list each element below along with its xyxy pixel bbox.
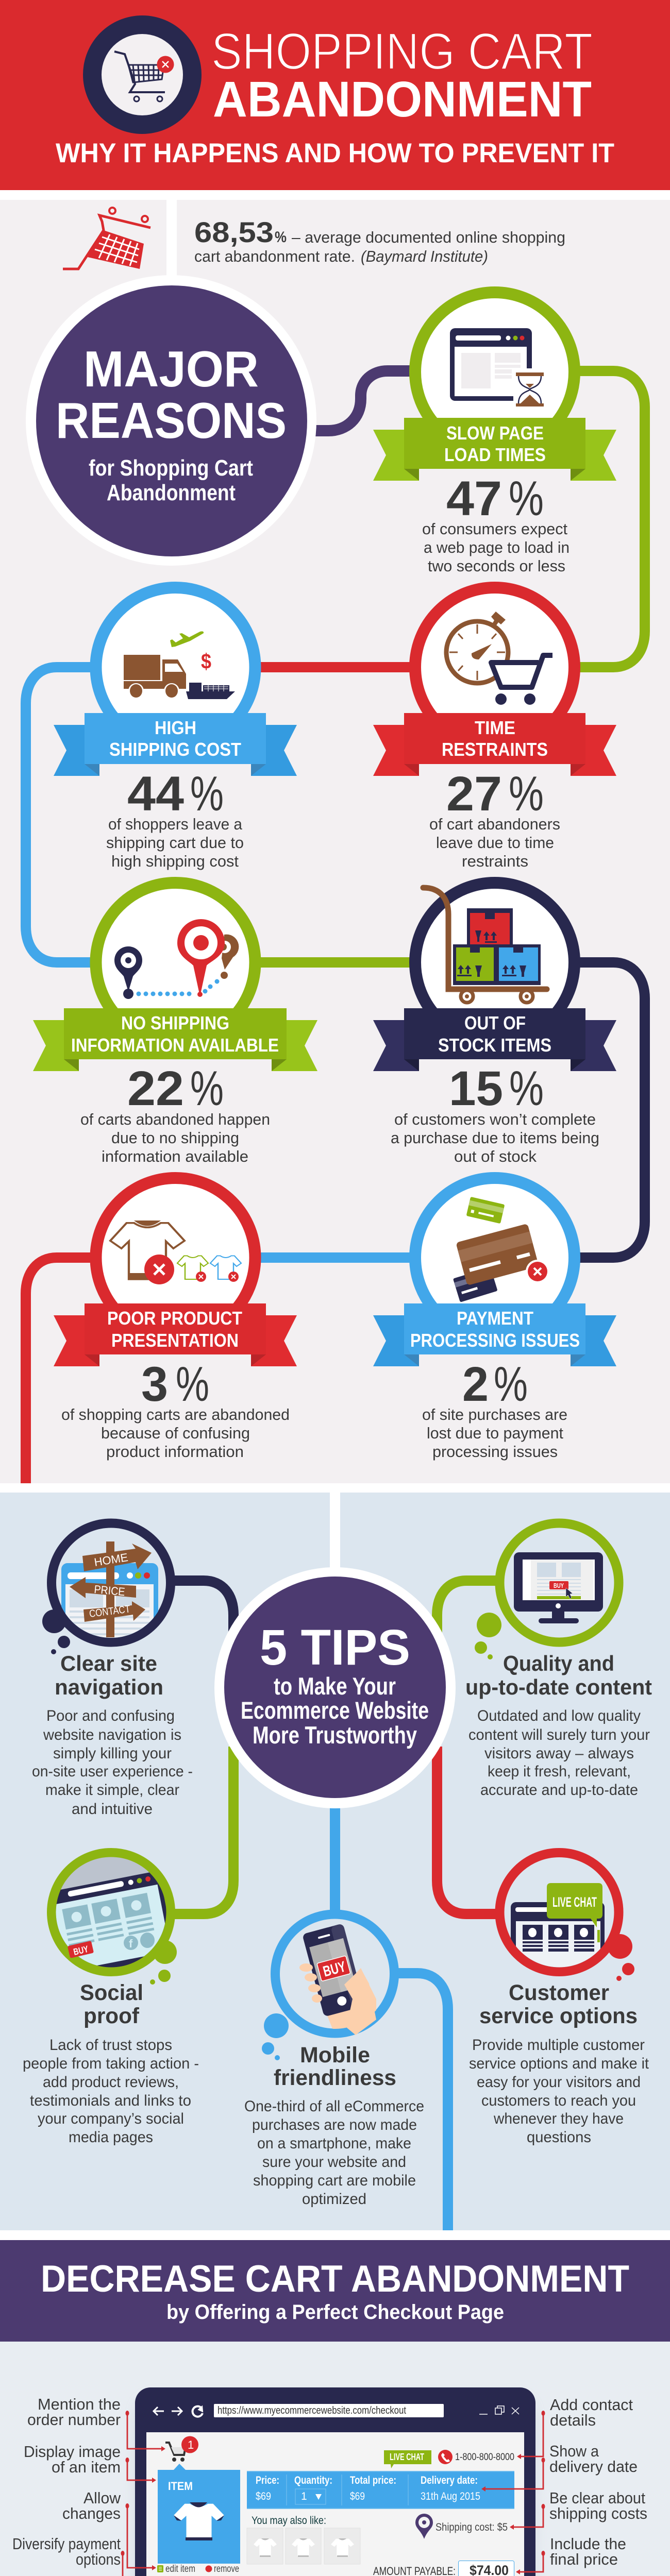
circle: five tips	[214, 1567, 456, 1808]
heading	[479, 1980, 638, 2028]
order table: $69	[256, 2490, 271, 2502]
description: purchases are now made	[252, 2116, 417, 2133]
callouts: left labels: order number	[27, 2411, 121, 2429]
statistic: abandonment rate: (Baymard Institute)	[361, 247, 488, 265]
statistic: 44	[127, 767, 184, 821]
ribbon label: PAYMENT	[457, 1308, 533, 1329]
panel: slow page load times	[373, 293, 616, 575]
description: of site purchases are	[422, 1405, 567, 1423]
callouts: left labels: Diversify payment	[12, 2535, 121, 2553]
heading: Clear site	[60, 1651, 157, 1675]
item card: edit item	[165, 2564, 195, 2574]
description: simply killing your	[53, 1745, 172, 1762]
arrows: callout pointers	[121, 2411, 545, 2576]
statistic: abandonment rate	[194, 216, 565, 265]
description: and intuitive	[72, 1801, 153, 1818]
circle: major reasons	[26, 275, 316, 566]
section background: five tips	[0, 1493, 670, 2230]
icon: social browser in bubble: f	[129, 1937, 133, 1950]
ribbon label	[410, 1308, 580, 1351]
contact phone	[438, 2450, 514, 2464]
statistic	[462, 1357, 528, 1412]
icon: live chat browser	[500, 1853, 634, 1981]
description: media pages	[69, 2129, 153, 2146]
heading: 5 tips: 5 TIPS	[260, 1619, 410, 1675]
order table: Quantity:	[294, 2475, 332, 2486]
amount payable	[373, 2561, 514, 2576]
section background: major reasons	[0, 200, 670, 1483]
heading: Social	[80, 1980, 143, 2005]
icon: browser with hourglass	[450, 328, 546, 410]
shipping cost	[415, 2514, 508, 2539]
description: whenever they have	[493, 2110, 624, 2127]
live chat button	[384, 2450, 431, 2468]
callouts: left labels: changes	[62, 2504, 121, 2522]
ribbon label	[438, 1012, 551, 1056]
description: a web page to load in	[424, 538, 569, 556]
banner: decrease cart abandonment	[0, 2240, 670, 2342]
icon: truck, plane and ship: $	[201, 649, 211, 673]
description: leave due to time	[436, 834, 554, 852]
callouts: right labels: Add contact	[550, 2396, 633, 2414]
icon: phone in hand: BUY	[322, 1958, 347, 1980]
ribbon	[373, 1303, 616, 1366]
description: a purchase due to items being	[391, 1129, 599, 1147]
ribbon label: HIGH	[155, 717, 196, 738]
order table	[247, 2471, 514, 2509]
subheading: Abandonment	[107, 480, 236, 505]
heading: navigation	[55, 1675, 163, 1699]
heading	[55, 1651, 163, 1699]
panel: poor product presentation	[54, 1178, 297, 1461]
callouts: right labels: Show a	[549, 2442, 599, 2460]
icon: social browser in bubble	[47, 1848, 177, 1985]
subheading: for Shopping Cart	[89, 455, 253, 481]
heading: proof	[83, 2004, 140, 2028]
panel: time restraints	[373, 587, 616, 870]
description	[391, 1110, 599, 1165]
description: accurate and up-to-date	[480, 1782, 638, 1799]
header	[0, 0, 670, 190]
statistic: 15	[449, 1061, 503, 1116]
heading: Customer	[509, 1980, 609, 2005]
heading: Mobile	[300, 2043, 370, 2067]
recommended items: You may also like:	[252, 2515, 326, 2527]
subheading: to Make Your	[274, 1672, 396, 1700]
description	[422, 1405, 567, 1461]
icon: signpost in bubble: PRICE	[94, 1583, 126, 1598]
description: on-site user experience -	[32, 1763, 193, 1780]
heading: up-to-date content	[465, 1675, 652, 1699]
ribbon label: SHIPPING COST	[109, 739, 241, 760]
description: Provide multiple customer	[472, 2037, 645, 2054]
ribbon label: INFORMATION AVAILABLE	[71, 1035, 279, 1056]
description: optimized	[302, 2191, 366, 2208]
statistic	[449, 1061, 544, 1116]
icon: phone in hand	[262, 1914, 394, 2060]
title: ABANDONMENT	[213, 71, 592, 127]
callouts: left labels	[12, 2395, 121, 2576]
description: of shoppers leave a	[108, 815, 243, 833]
description: content will surely turn your	[468, 1726, 650, 1743]
icon: monitor in bubble	[475, 1523, 618, 1659]
subheading	[89, 455, 253, 505]
statistic: 3	[141, 1357, 168, 1412]
callouts: left labels: Mention the	[38, 2395, 121, 2413]
ribbon label: SLOW PAGE	[446, 422, 544, 444]
description: Outdated and low quality	[477, 1707, 641, 1724]
callouts: right labels: delivery date	[549, 2458, 638, 2476]
mockup: checkout browser window	[135, 2387, 535, 2576]
ribbon	[54, 713, 297, 776]
description: your company’s social	[38, 2110, 184, 2127]
panel: high shipping cost	[54, 587, 297, 870]
description: product information	[106, 1443, 244, 1461]
statistic: abandonment rate: cart abandonment rate.	[194, 247, 355, 265]
contact phone: 1-800-800-8000	[455, 2452, 514, 2463]
ribbon label: LOAD TIMES	[444, 444, 546, 465]
order table: 31th Aug 2015	[421, 2490, 480, 2502]
icon: cart with badge: 1	[188, 2438, 194, 2451]
heading	[465, 1651, 652, 1699]
statistic	[446, 471, 544, 526]
description: high shipping cost	[111, 852, 239, 870]
description: visitors away – always	[484, 1745, 634, 1762]
order table: Delivery date:	[421, 2475, 478, 2486]
statistic: 2	[462, 1357, 489, 1412]
panel: customer service options	[469, 1853, 649, 2146]
panel: mobile friendliness	[244, 1914, 424, 2208]
heading: Quality and	[503, 1651, 614, 1675]
description	[422, 520, 569, 575]
description	[61, 1405, 290, 1461]
ribbon label: NO SHIPPING	[121, 1012, 229, 1033]
order table: 1	[301, 2490, 307, 2502]
description: on a smartphone, make	[257, 2135, 411, 2152]
description: add product reviews,	[43, 2074, 179, 2091]
item card: remove	[214, 2564, 239, 2574]
heading: major reasons	[56, 341, 287, 449]
description: of shopping carts are abandoned	[61, 1405, 290, 1423]
browser toolbar	[154, 2404, 519, 2417]
callouts: right labels	[549, 2396, 647, 2576]
heading: major reasons: REASONS	[56, 392, 287, 449]
description	[32, 1707, 193, 1818]
subheading	[241, 1672, 429, 1749]
statistic: %	[494, 1357, 528, 1412]
icon: signpost in bubble: HOME	[93, 1551, 129, 1569]
description: keep it fresh, relevant,	[488, 1763, 631, 1780]
ribbon label	[109, 717, 241, 760]
statistic	[127, 767, 224, 821]
ribbon	[373, 418, 616, 481]
description	[80, 1110, 270, 1165]
subtitle: WHY IT HAPPENS AND HOW TO PREVENT IT	[56, 138, 614, 168]
callouts: left labels: Display image	[24, 2443, 121, 2461]
description	[244, 2098, 424, 2208]
item card	[157, 2464, 240, 2574]
description: of consumers expect	[422, 520, 567, 538]
item card: ITEM	[168, 2480, 193, 2493]
subheading: More Trustworthy	[253, 1721, 417, 1749]
statistic: %	[509, 1061, 544, 1116]
ribbon label: PRESENTATION	[111, 1330, 239, 1351]
ribbon label	[71, 1012, 279, 1056]
description: customers to reach you	[481, 2092, 636, 2109]
section background: checkout	[0, 2342, 670, 2576]
description: sure your website and	[262, 2154, 406, 2171]
description: easy for your visitors and	[477, 2074, 641, 2091]
ribbon label: RESTRAINTS	[442, 739, 548, 760]
ribbon label	[107, 1308, 242, 1351]
icon: tipped over cart	[63, 208, 150, 269]
order table: Total price:	[350, 2475, 396, 2486]
description: shopping cart are mobile	[253, 2172, 416, 2189]
ribbon label: STOCK ITEMS	[438, 1035, 551, 1056]
icon: truck, plane and ship	[124, 631, 235, 699]
ribbon label	[444, 422, 546, 465]
panel: out of stock items	[373, 883, 616, 1165]
heading: major reasons: MAJOR	[83, 341, 259, 397]
description: information available	[102, 1147, 248, 1165]
description	[106, 815, 244, 870]
connectors: tips path	[170, 1581, 500, 2230]
description	[429, 815, 560, 870]
statistic	[141, 1357, 209, 1412]
statistic: %	[509, 471, 544, 526]
ribbon label: PROCESSING ISSUES	[410, 1330, 580, 1351]
icon: t-shirts with crosses	[110, 1221, 241, 1284]
description: due to no shipping	[111, 1129, 239, 1147]
description: One-third of all eCommerce	[244, 2098, 424, 2115]
ribbon	[54, 1303, 297, 1366]
order table: Price:	[256, 2475, 279, 2486]
ribbon	[373, 1008, 616, 1071]
description: of carts abandoned happen	[80, 1110, 270, 1128]
heading: service options	[479, 2004, 638, 2028]
description: lost due to payment	[427, 1424, 563, 1442]
callouts: right labels: details	[550, 2411, 596, 2429]
icon: signpost in bubble: CONTACT	[89, 1603, 131, 1620]
heading: DECREASE CART ABANDONMENT	[41, 2258, 629, 2300]
description	[468, 1707, 650, 1799]
statistic: %	[509, 767, 544, 821]
description: questions	[527, 2129, 591, 2146]
ribbon label: OUT OF	[464, 1012, 526, 1033]
icon: stopwatch and cart	[446, 612, 552, 705]
description: testimonials and links to	[30, 2092, 191, 2109]
statistic: 47	[446, 471, 502, 526]
description: Poor and confusing	[46, 1707, 175, 1724]
ribbon label: POOR PRODUCT	[107, 1308, 242, 1329]
statistic: %	[190, 767, 224, 821]
statistic: %	[176, 1357, 209, 1412]
description: people from taking action -	[23, 2055, 199, 2072]
description: out of stock	[454, 1147, 537, 1165]
description: two seconds or less	[428, 557, 565, 575]
description	[23, 2037, 199, 2146]
description: because of confusing	[101, 1424, 250, 1442]
description: service options and make it	[469, 2055, 649, 2072]
callouts: left labels: options	[76, 2550, 121, 2568]
icon: abandoned cart badge	[83, 15, 202, 134]
live chat button: LIVE CHAT	[390, 2452, 424, 2462]
icon: boxes on hand truck	[423, 888, 547, 1003]
heading	[80, 1980, 143, 2028]
callouts: right labels: Be clear about	[549, 2489, 645, 2507]
order table: $69	[350, 2490, 365, 2502]
ribbon	[33, 1008, 317, 1071]
statistic	[127, 1061, 224, 1116]
description: restraints	[462, 852, 528, 870]
callouts: right labels: final price	[550, 2550, 618, 2568]
icon: cart with badge	[165, 2436, 198, 2462]
description: make it simple, clear	[45, 1782, 179, 1799]
description: shipping cart due to	[106, 834, 244, 852]
subheading: by Offering a Perfect Checkout Page	[166, 2301, 504, 2324]
statistic: 22	[127, 1061, 184, 1116]
description: processing issues	[432, 1443, 558, 1461]
ribbon label: TIME	[475, 717, 515, 738]
recommended items	[247, 2515, 360, 2564]
callouts: left labels: of an item	[52, 2458, 121, 2476]
description: website navigation is	[43, 1726, 181, 1743]
browser toolbar: https://www.myecommercewebsite.com/checkout	[217, 2405, 406, 2416]
shipping cost: Shipping cost: $5	[435, 2521, 508, 2533]
ribbon	[373, 713, 616, 776]
statistic: abandonment rate: %	[275, 229, 287, 246]
statistic	[446, 767, 544, 821]
statistic: %	[190, 1061, 224, 1116]
panel: payment processing issues	[373, 1178, 616, 1461]
callouts: right labels: Include the	[550, 2535, 626, 2553]
panel: no shipping information	[33, 883, 317, 1165]
description: Lack of trust stops	[49, 2037, 172, 2054]
description: of cart abandoners	[429, 815, 560, 833]
title: SHOPPING CART	[211, 23, 593, 80]
icon: signpost in bubble	[42, 1523, 171, 1654]
subheading: Ecommerce Website	[241, 1697, 429, 1724]
icon: credit cards	[453, 1197, 549, 1302]
panel: clear site navigation	[32, 1523, 193, 1818]
heading: friendliness	[274, 2065, 396, 2090]
icon: map pins and route	[114, 919, 239, 999]
icon: live chat browser: LIVE CHAT	[552, 1894, 597, 1910]
connectors: major reasons path	[26, 371, 645, 1483]
description	[469, 2037, 649, 2146]
callouts: left labels: Allow	[83, 2489, 121, 2507]
panel: social proof	[22, 1840, 200, 2146]
statistic: abandonment rate: – average documented online shopping	[292, 228, 565, 246]
statistic: abandonment rate: 68,53	[194, 216, 274, 248]
heading	[274, 2043, 396, 2090]
ribbon label	[442, 717, 548, 760]
title	[211, 23, 593, 127]
icon: social browser in bubble: BUY	[73, 1944, 89, 1957]
callouts: right labels: shipping costs	[549, 2504, 647, 2522]
description: of customers won’t complete	[394, 1110, 596, 1128]
icon: monitor in bubble: BUY	[554, 1582, 564, 1589]
panel: quality content	[465, 1523, 652, 1799]
statistic: 27	[446, 767, 502, 821]
